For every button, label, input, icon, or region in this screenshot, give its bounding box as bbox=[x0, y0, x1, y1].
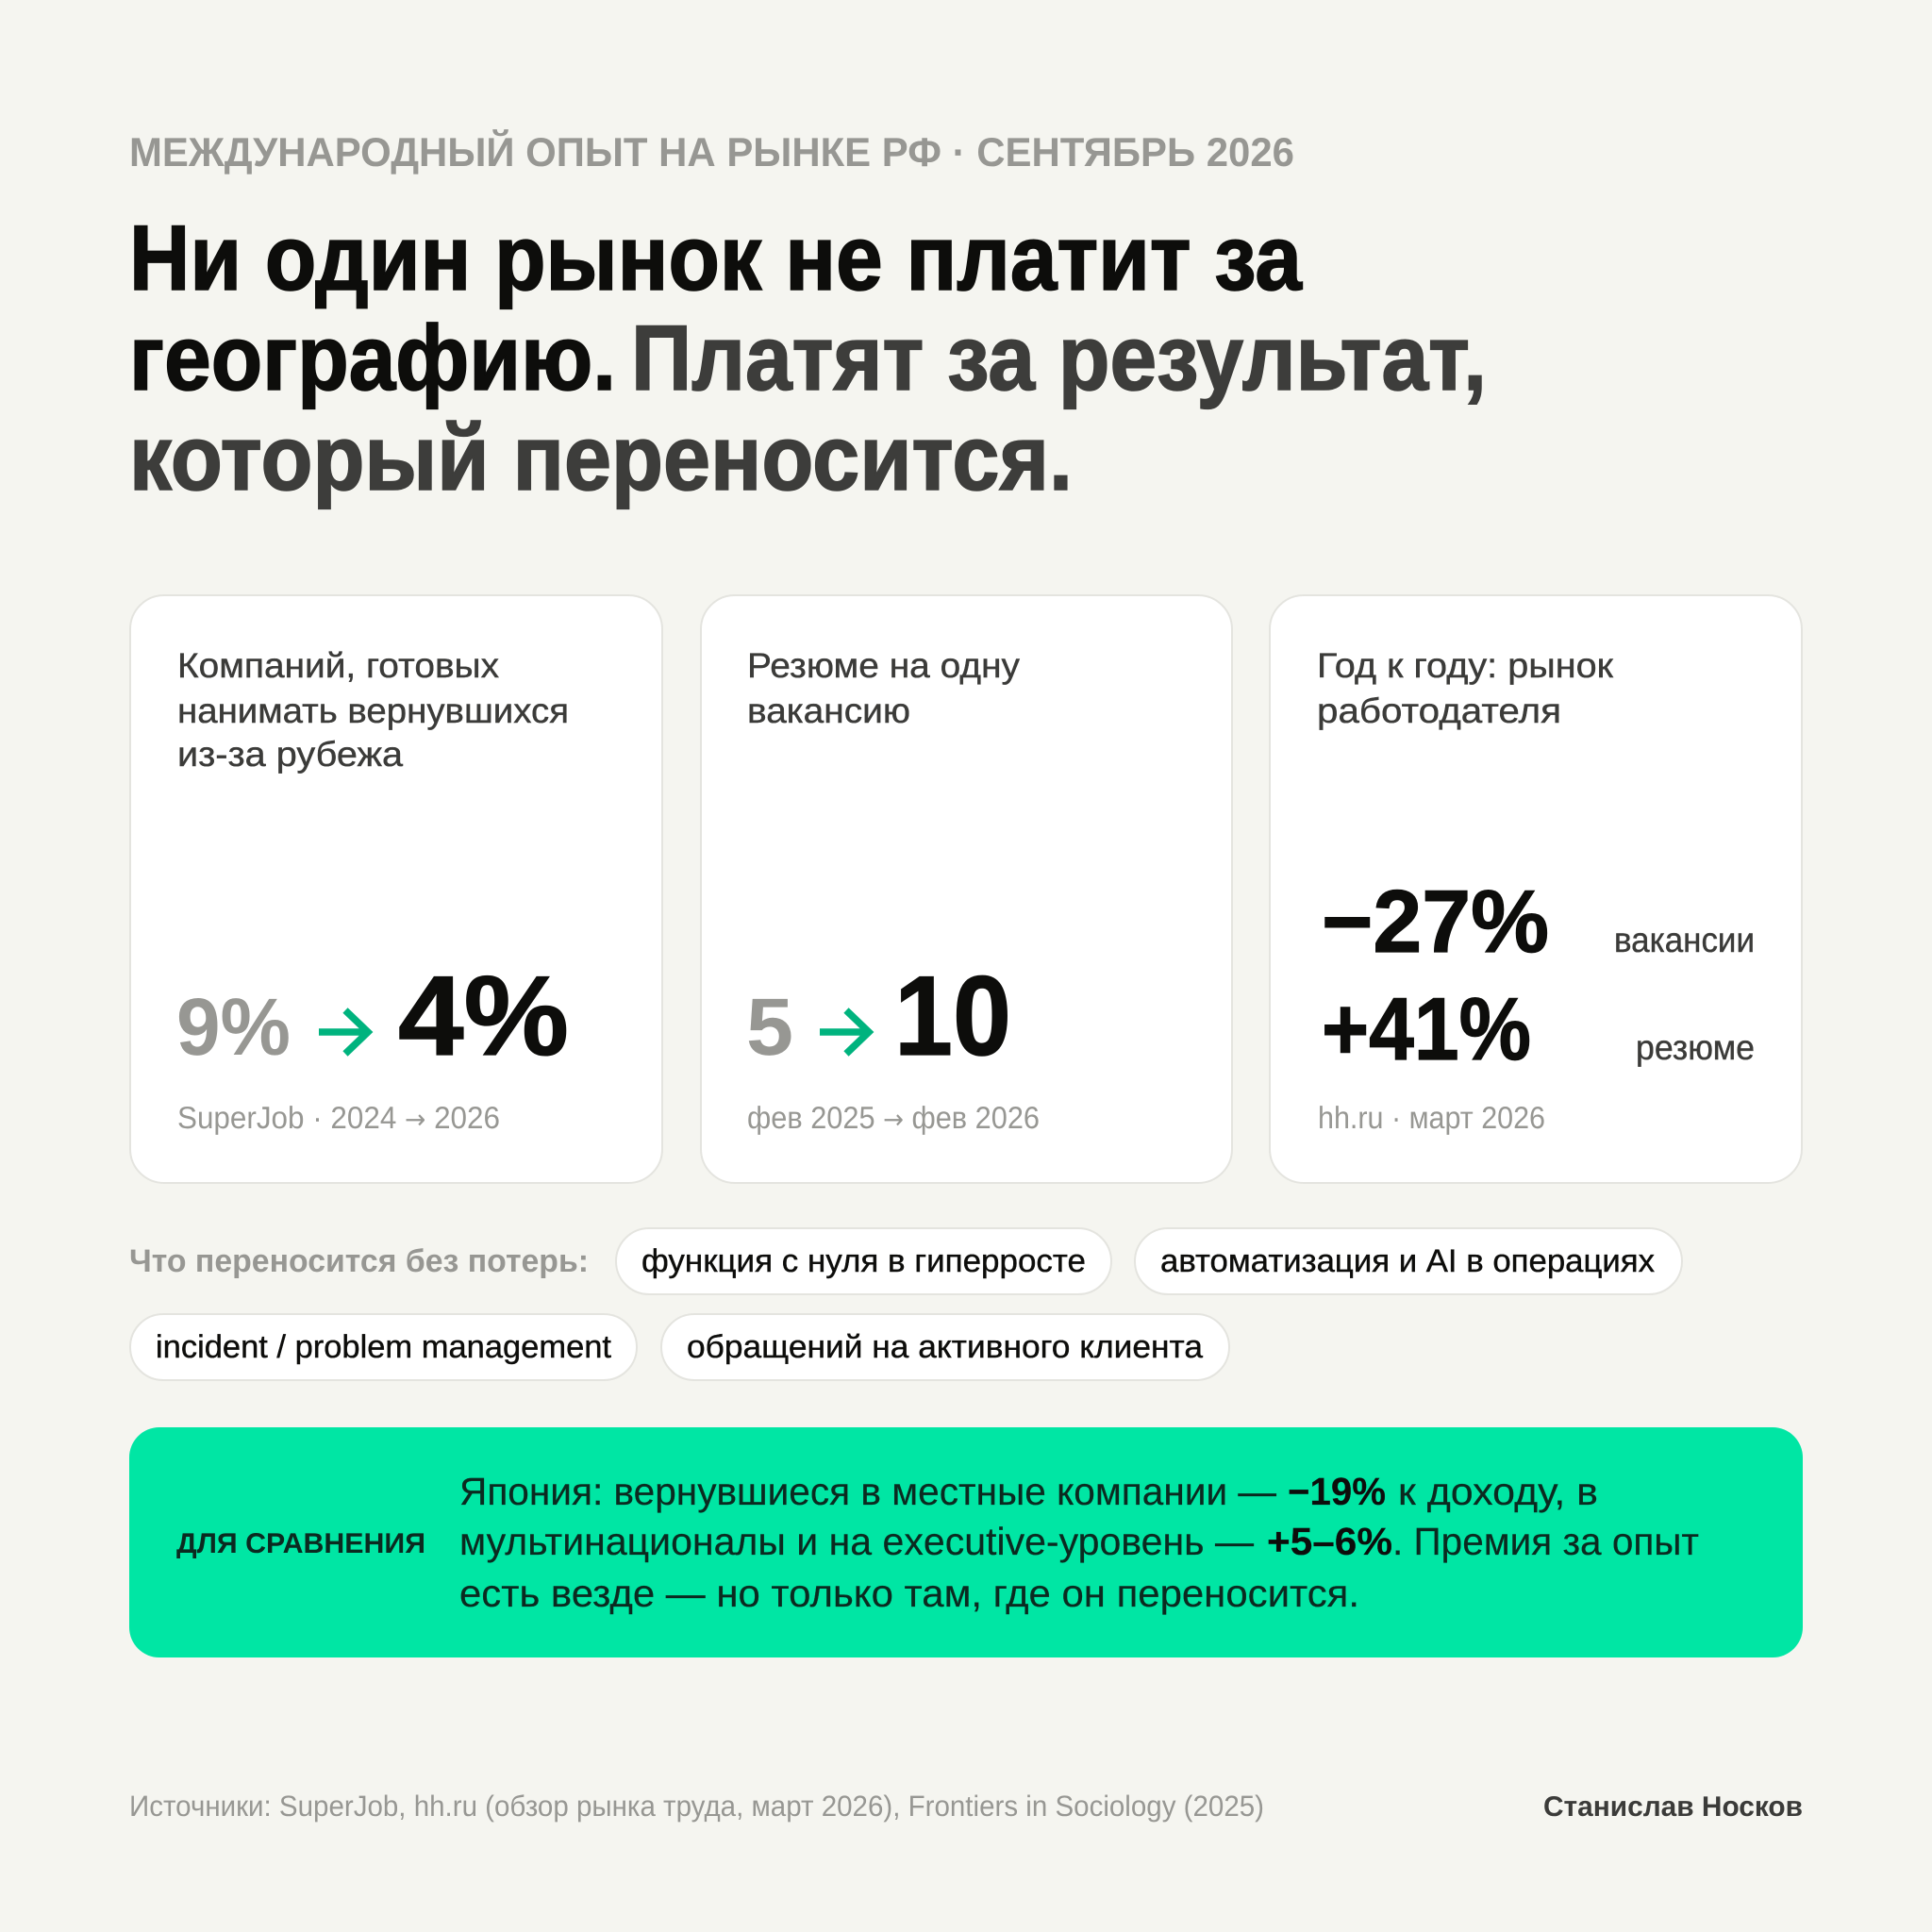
vacancies stat: вакансии bbox=[1614, 921, 1755, 959]
card 2 label: Резюме на одну bbox=[747, 646, 1021, 685]
icon: green arrow card 1 bbox=[319, 1010, 368, 1054]
card 2 source: фев 2025 → фев 2026 bbox=[747, 1100, 1040, 1135]
card 1 new value: 4% bbox=[398, 953, 569, 1079]
card 3 label bbox=[1317, 646, 1614, 730]
eyebrow: section label: МЕЖДУНАРОДНЫЙ ОПЫТ НА РЫНКЕ РФ · СЕНТЯБРЬ 2026 bbox=[129, 129, 1294, 175]
card 3 label: работодателя bbox=[1317, 691, 1561, 730]
card 2 label: вакансию bbox=[747, 691, 910, 730]
resumes stat bbox=[1322, 979, 1755, 1078]
vacancies stat: −27% bbox=[1322, 872, 1549, 971]
callout text: −19% bbox=[1288, 1470, 1386, 1513]
tag: automation and AI: автоматизация и AI в операциях bbox=[1160, 1243, 1655, 1279]
title: географию. bbox=[129, 306, 616, 409]
callout label: ДЛЯ СРАВНЕНИЯ bbox=[176, 1528, 425, 1559]
callout text: . Премия за опыт bbox=[1392, 1520, 1699, 1563]
footer: sources: Источники: SuperJob, hh.ru (обзор рынка труда, март 2026), Frontiers in Sociology (2025) bbox=[129, 1790, 1264, 1823]
card 1 label: из-за рубежа bbox=[177, 735, 403, 774]
callout text: Япония: вернувшиеся в местные компании — bbox=[459, 1470, 1276, 1513]
title: Ни один рынок не платит за bbox=[129, 206, 1303, 309]
icon: green arrow card 2 bbox=[820, 1010, 869, 1054]
card 1 label bbox=[177, 646, 569, 774]
callout text: мультинационалы и на executive-уровень — bbox=[459, 1520, 1254, 1563]
callout text bbox=[459, 1470, 1699, 1615]
callout: comparison with Japan bbox=[129, 1427, 1803, 1657]
vacancies stat bbox=[1322, 872, 1755, 971]
footer: author: Станислав Носков bbox=[1543, 1791, 1803, 1823]
callout text: +5–6% bbox=[1267, 1520, 1392, 1563]
tag: function from zero bbox=[616, 1228, 1111, 1294]
title: Платят за результат, bbox=[631, 306, 1487, 409]
callout text: есть везде — но только там, где он переносится. bbox=[459, 1572, 1359, 1615]
tag: incident management: incident / problem management bbox=[156, 1329, 612, 1365]
panel: resumes per vacancy bbox=[701, 595, 1232, 1183]
resumes stat: резюме bbox=[1636, 1028, 1755, 1067]
callout text: к доходу, в bbox=[1398, 1470, 1598, 1513]
tag: function from zero: функция с нуля в гиперросте bbox=[641, 1243, 1086, 1279]
tag: requests per active client: обращений на активного клиента bbox=[687, 1329, 1203, 1365]
card 1 old value: 9% bbox=[176, 982, 291, 1073]
card 2 old value: 5 bbox=[746, 982, 793, 1073]
panel: companies ready to hire returnees bbox=[130, 595, 662, 1183]
card 1 label: нанимать вернувшихся bbox=[177, 691, 569, 730]
card 2 new value: 10 bbox=[894, 953, 1011, 1079]
tag: automation and AI bbox=[1135, 1228, 1682, 1294]
card 2 label bbox=[747, 646, 1021, 730]
card 3 label: Год к году: рынок bbox=[1317, 646, 1614, 685]
title bbox=[129, 206, 1487, 509]
title: который переносится. bbox=[129, 406, 1073, 509]
what transfers heading: Что переносится без потерь: bbox=[129, 1243, 589, 1279]
card 1 source: SuperJob · 2024 → 2026 bbox=[177, 1100, 500, 1135]
card 1 label: Компаний, готовых bbox=[177, 646, 500, 685]
resumes stat: +41% bbox=[1322, 979, 1531, 1078]
tag: requests per active client bbox=[661, 1314, 1229, 1380]
tag: incident management bbox=[130, 1314, 637, 1380]
card 3 source: hh.ru · март 2026 bbox=[1318, 1100, 1545, 1135]
panel: year over year employer's market bbox=[1270, 595, 1802, 1183]
